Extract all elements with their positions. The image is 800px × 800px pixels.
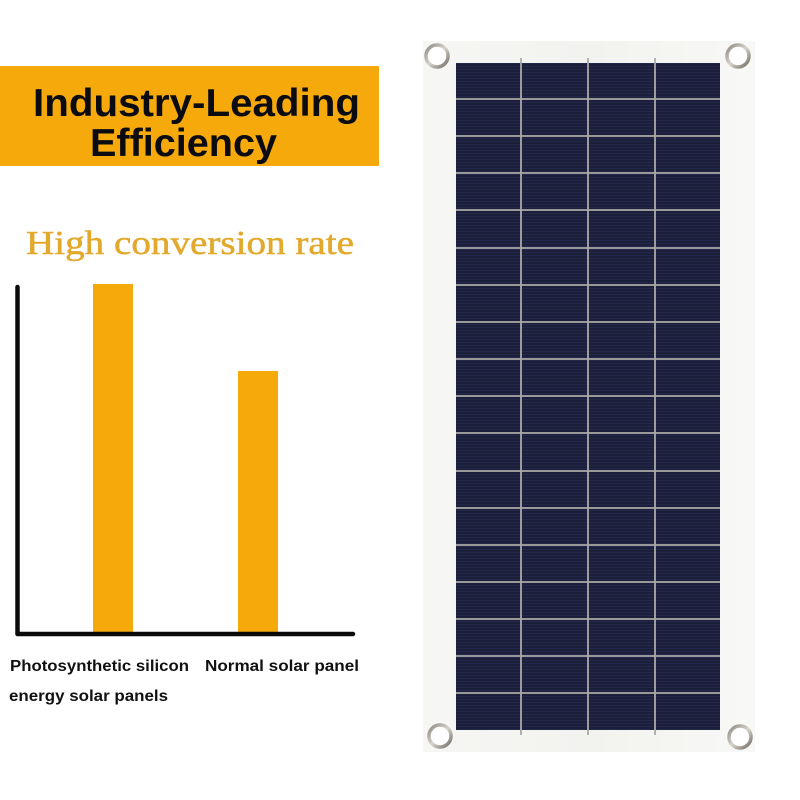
bar labels: Photosynthetic silicon [10, 658, 189, 675]
cell grid lines [456, 58, 720, 735]
chart axes [18, 287, 353, 634]
bar chart [18, 284, 353, 634]
bar: normal solar panel [238, 371, 278, 632]
chart title: High conversion rate [26, 225, 354, 262]
banner heading [33, 82, 360, 165]
banner heading: Industry-Leading [33, 82, 360, 125]
panel backing sheet [423, 41, 755, 752]
bar labels: energy solar panels [9, 688, 168, 705]
bar labels: Normal solar panel [205, 658, 359, 675]
banner heading: Efficiency [90, 122, 277, 165]
grommets [426, 45, 751, 748]
banner [0, 66, 379, 166]
solar cells [456, 63, 720, 730]
solar panel illustration [423, 41, 755, 752]
bar: photosynthetic silicon [93, 284, 133, 632]
bar labels [9, 658, 359, 705]
